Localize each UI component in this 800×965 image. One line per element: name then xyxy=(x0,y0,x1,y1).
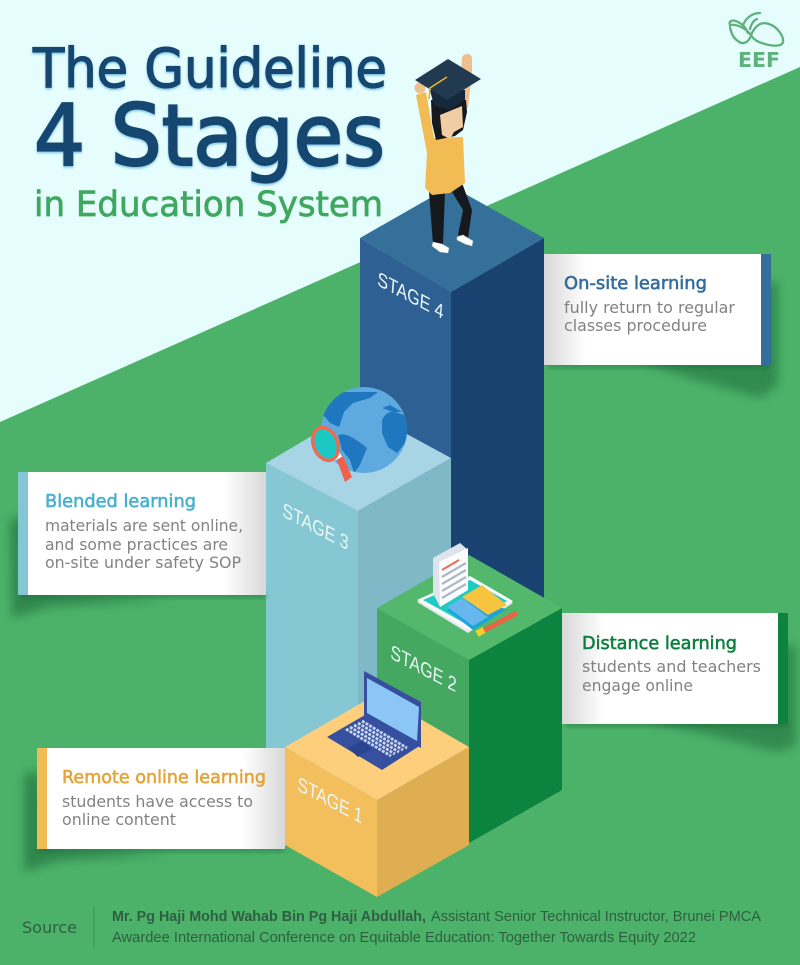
title line 1: The Guideline xyxy=(32,37,387,100)
papers xyxy=(433,543,468,607)
continents xyxy=(324,392,407,472)
butterfly mark xyxy=(730,13,783,46)
card shadow xyxy=(10,515,170,618)
description: and some practices are xyxy=(45,535,228,554)
card shadow xyxy=(650,645,796,752)
legs xyxy=(429,183,472,244)
source label: Source xyxy=(22,918,77,937)
column: stage 3 xyxy=(266,408,451,760)
column: stage 4 xyxy=(360,186,544,620)
source footer xyxy=(22,907,761,947)
title line 3: in Education System xyxy=(34,185,383,225)
title line 2: 4 Stages xyxy=(34,87,385,186)
column: stage 1 xyxy=(285,694,469,897)
column: stage 2 xyxy=(377,555,562,843)
description: engage online xyxy=(582,676,693,695)
books xyxy=(447,600,507,630)
card: remote online learning xyxy=(24,748,285,872)
card: distance learning xyxy=(562,613,796,752)
face xyxy=(440,106,463,139)
magnifier xyxy=(337,456,352,482)
pencil xyxy=(481,613,517,632)
logo: EEF xyxy=(730,13,783,72)
description: materials are sent online, xyxy=(45,516,243,535)
source text: Assistant Senior Technical Instructor, Brunei PMCA xyxy=(431,909,761,925)
label: stage 1: STAGE 1 xyxy=(297,772,363,828)
card: on-site learning xyxy=(544,254,778,398)
keyboard xyxy=(346,721,407,756)
heading: Blended learning xyxy=(45,492,196,512)
hair xyxy=(431,100,467,140)
description: students have access to xyxy=(62,792,253,811)
title xyxy=(32,37,387,225)
icon: tablet, papers and books xyxy=(417,543,517,634)
logo text: EEF xyxy=(738,48,780,72)
icon: laptop xyxy=(327,671,421,770)
description: online content xyxy=(62,810,176,829)
shoes xyxy=(432,235,473,253)
card shadow xyxy=(24,770,170,872)
label: stage 2: STAGE 2 xyxy=(390,640,457,697)
description: on-site under safety SOP xyxy=(45,553,241,572)
source text: Awardee International Conference on Equitable Education: Together Towards Equity 2022 xyxy=(112,930,696,946)
heading: Distance learning xyxy=(582,634,737,654)
cap xyxy=(430,90,465,110)
heading: On-site learning xyxy=(564,274,707,294)
icon: graduate figure xyxy=(414,54,481,253)
card shadow xyxy=(640,282,778,398)
label: stage 3: STAGE 3 xyxy=(282,498,349,555)
source text: Mr. Pg Haji Mohd Wahab Bin Pg Haji Abdullah, xyxy=(112,909,426,925)
card: blended learning xyxy=(10,472,266,618)
torso xyxy=(416,92,465,195)
touchpad xyxy=(348,741,372,757)
heading: Remote online learning xyxy=(62,768,266,788)
description: fully return to regular xyxy=(564,298,735,317)
icon: globe and magnifier xyxy=(308,387,410,482)
description: classes procedure xyxy=(564,316,707,335)
label: stage 4: STAGE 4 xyxy=(377,267,445,324)
description: students and teachers xyxy=(582,657,761,676)
